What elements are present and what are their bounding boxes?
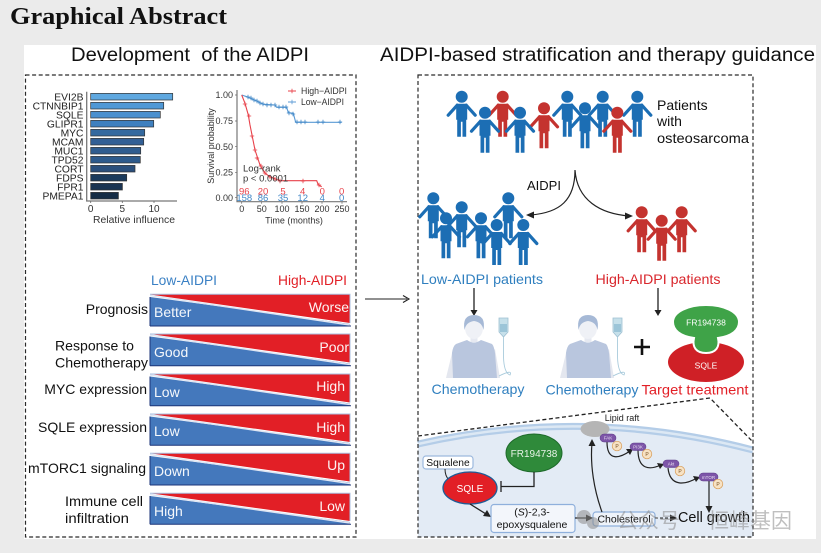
row: immune cell infiltration: Low xyxy=(319,498,346,514)
low-AIDPI label: Low-AIDPI patients xyxy=(421,271,543,287)
arrow: SQLE to epoxysqualene xyxy=(470,504,491,517)
cell growth label: Cell growth xyxy=(678,510,750,526)
survival chart: 50 xyxy=(257,204,267,214)
row: MYC expression xyxy=(44,374,351,406)
comparison headers: Low-AIDPI xyxy=(151,272,217,288)
bar chart: relative influence: MCAM xyxy=(52,138,84,148)
comparison headers: High-AIDPI xyxy=(278,272,347,288)
signaling cascade: Akt xyxy=(668,462,675,466)
signaling cascade: P xyxy=(678,469,682,475)
lipid raft xyxy=(580,413,640,437)
FR194738 inhibitor: FR194738 xyxy=(511,449,558,460)
bar chart: relative influence: MYC xyxy=(61,128,84,140)
row: chemotherapy response: Poor xyxy=(319,339,349,355)
survival chart: 200 xyxy=(314,204,330,214)
survival chart: 150 xyxy=(294,204,310,214)
signaling cascade: FAK xyxy=(604,436,612,441)
watermark: 公众号 xyxy=(617,510,680,533)
row: prognosis: Worse xyxy=(309,299,349,315)
row: immune cell infiltration: High xyxy=(154,503,183,519)
cell background xyxy=(418,428,753,537)
bar chart: relative influence: MUC1 xyxy=(54,146,84,158)
row: SQLE expression: Low xyxy=(154,423,181,439)
zoom lines xyxy=(418,398,753,442)
FR194738 inhibitor xyxy=(501,434,562,492)
row: SQLE expression: High xyxy=(316,419,345,435)
high-AIDPI people xyxy=(628,206,695,261)
row: MYC expression: High xyxy=(316,378,345,394)
survival chart: Time (months) xyxy=(265,216,323,226)
signaling cascade: PI3K xyxy=(633,444,643,450)
bar chart: relative influence: CTNNBIP1 xyxy=(33,102,84,112)
arrow: between panels xyxy=(365,296,409,302)
watermark xyxy=(577,510,792,533)
row: prognosis: Prognosis xyxy=(86,301,148,317)
chemotherapy label right: Chemotherapy xyxy=(546,382,638,398)
SQLE enzyme xyxy=(443,472,497,504)
signaling cascade: mTOR xyxy=(702,475,716,480)
arrow: cholesterol to raft xyxy=(588,439,602,512)
signaling cascade: P xyxy=(716,482,720,488)
survival chart: 0.75 xyxy=(215,116,233,126)
survival chart: 0.00 xyxy=(215,193,233,203)
heading: stratification: AIDPI-based stratification and therapy guidance xyxy=(380,45,815,66)
arrow: cholesterol to growth xyxy=(655,514,677,522)
row: immune cell infiltration: Immune cell xyxy=(65,493,143,509)
signaling cascade: P xyxy=(615,444,619,450)
survival chart: 0.25 xyxy=(215,168,233,178)
row: prognosis: Better xyxy=(154,304,192,320)
survival chart: 1.00 xyxy=(215,90,233,100)
lipid raft: Lipid raft xyxy=(605,413,640,423)
survival chart: 0 xyxy=(320,186,325,198)
bar chart: relative influence: GLIPR1 xyxy=(47,120,84,130)
icon: SQLE and inhibitor: FR194738 xyxy=(686,318,726,328)
bar chart: relative influence: EVI2B xyxy=(54,92,84,104)
patients group xyxy=(448,91,651,153)
survival chart: 4 xyxy=(300,186,305,198)
epoxysqualene box: epoxysqualene xyxy=(497,519,567,531)
icon: patient chemotherapy xyxy=(446,315,511,378)
row: chemotherapy response: Good xyxy=(154,344,188,360)
chart legend xyxy=(288,86,347,107)
icon: SQLE and inhibitor xyxy=(668,305,744,382)
survival chart xyxy=(206,86,350,226)
heading: development: Development of the AIDPI xyxy=(71,45,309,66)
row: chemotherapy response: Chemotherapy xyxy=(55,354,148,370)
row: chemotherapy response: Response to xyxy=(55,338,134,354)
AIDPI split arrows xyxy=(526,170,633,220)
squalene box: Squalene xyxy=(426,458,470,469)
row: mTORC1 signaling: mTORC1 signaling xyxy=(28,460,146,476)
survival chart: 86 xyxy=(258,193,268,204)
survival chart: 4 xyxy=(320,193,325,204)
survival chart: Survival probability xyxy=(206,108,216,184)
chart legend: Low−AIDPI xyxy=(301,97,344,107)
row: SQLE expression: SQLE expression xyxy=(38,419,147,435)
survival chart: 20 xyxy=(258,186,268,198)
patients label: osteosarcoma xyxy=(657,130,749,146)
row: prognosis xyxy=(86,294,351,326)
row: chemotherapy response xyxy=(55,334,351,370)
target treatment label: Target treatment xyxy=(642,382,749,398)
SQLE enzyme: SQLE xyxy=(457,484,484,495)
epoxysqualene box xyxy=(491,504,575,532)
survival chart: 100 xyxy=(274,204,290,214)
icon: patient chemotherapy combined xyxy=(560,315,625,378)
survival chart: 158 xyxy=(236,193,252,204)
bar chart: relative influence: 0 xyxy=(88,204,94,215)
panel: development of the AIDPI xyxy=(26,75,356,537)
survival chart: p < 0.0001 xyxy=(243,174,288,184)
panel: stratification and therapy xyxy=(418,75,753,537)
signaling cascade: P xyxy=(645,452,649,458)
survival chart: 0 xyxy=(239,204,244,214)
high-AIDPI label: High-AIDPI patients xyxy=(596,271,720,287)
title: Graphical Abstract xyxy=(10,4,227,30)
arrow: to cholesterol xyxy=(575,514,593,522)
survival chart: 5 xyxy=(280,186,286,198)
patients label: Patients xyxy=(657,97,708,113)
patients label xyxy=(656,97,749,146)
icon: SQLE and inhibitor: SQLE xyxy=(695,360,718,370)
bar chart: relative influence: FPR1 xyxy=(57,182,84,194)
survival chart: 0.50 xyxy=(215,142,233,152)
row: immune cell infiltration: infiltration xyxy=(65,510,129,526)
bar chart: relative influence: FDPS xyxy=(56,174,84,184)
signaling cascade xyxy=(600,434,723,513)
bar chart: relative influence: 10 xyxy=(148,204,160,215)
comparison headers xyxy=(151,272,347,288)
survival chart: 250 xyxy=(334,204,350,214)
bar chart: relative influence: PMEPA1 xyxy=(42,192,84,202)
survival chart: 12 xyxy=(297,193,308,204)
connector: squalene to SQLE xyxy=(445,469,449,480)
row: MYC expression: MYC expression xyxy=(44,381,147,397)
row: mTORC1 signaling: Up xyxy=(327,457,345,473)
AIDPI split arrows: AIDPI xyxy=(527,178,561,193)
bar chart: relative influence: CORT xyxy=(54,164,84,176)
watermark: 恒峰基因 xyxy=(708,510,792,533)
row: SQLE expression xyxy=(38,414,351,445)
cell membrane xyxy=(418,426,753,450)
chart legend: High−AIDPI xyxy=(301,86,347,96)
row: immune cell infiltration xyxy=(65,493,351,526)
low-AIDPI people xyxy=(420,192,537,265)
plus sign xyxy=(634,339,650,355)
survival chart: 0 xyxy=(339,186,344,198)
survival chart: 35 xyxy=(278,193,288,204)
bar chart: relative influence: SQLE xyxy=(56,110,84,122)
row: mTORC1 signaling xyxy=(28,453,351,485)
survival chart: 96 xyxy=(239,186,250,198)
patients label: with xyxy=(656,113,682,129)
cholesterol box: Cholesterol xyxy=(597,514,651,526)
survival chart: 0 xyxy=(339,193,344,204)
bar chart: relative influence: TPD52 xyxy=(51,156,84,166)
epoxysqualene box: (S)-2,3- xyxy=(514,506,550,518)
bar chart: relative influence: Relative influence xyxy=(93,215,175,226)
arrows to treatment xyxy=(474,288,658,311)
chemotherapy label left: Chemotherapy xyxy=(432,381,524,397)
bar chart: relative influence xyxy=(33,92,177,226)
row: mTORC1 signaling: Down xyxy=(154,463,190,479)
row: MYC expression: Low xyxy=(154,384,181,400)
bar chart: relative influence: 5 xyxy=(120,204,126,215)
survival chart: Log-rank xyxy=(243,164,281,174)
